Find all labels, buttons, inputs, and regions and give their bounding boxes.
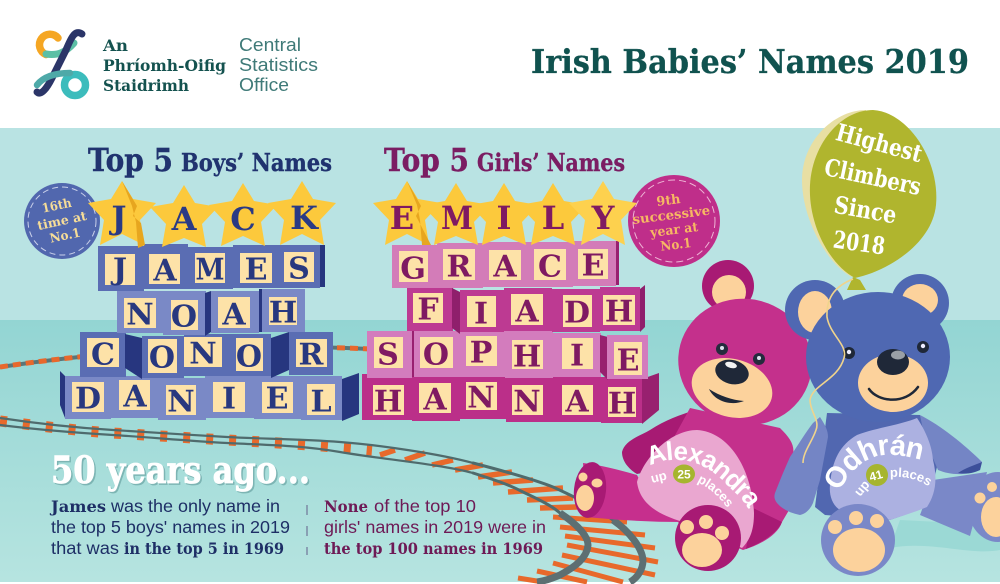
- badge: 16th time at No.1: time at: [36, 208, 88, 233]
- name: Daniel: D: [75, 382, 101, 416]
- blue bear label: places: [890, 468, 931, 486]
- logo English name: [239, 35, 318, 95]
- blue bear body: [815, 413, 937, 520]
- pink bear arm: [622, 410, 705, 474]
- heading: top 5 girls: [384, 141, 625, 179]
- name: Sophie: [367, 331, 648, 380]
- blue bear leg: [920, 472, 987, 536]
- pink bear front foot: [675, 505, 741, 571]
- boys note: the top 5 boys' names in 2019: [51, 517, 290, 537]
- name: Fiadh: A: [514, 294, 539, 330]
- name: Emily with stars: [373, 181, 637, 245]
- balloon knot: [847, 277, 866, 290]
- name: Jack with stars: J: [108, 199, 127, 237]
- logo Irish name: An: [102, 36, 128, 55]
- name: Daniel: [60, 371, 359, 421]
- pink bear label: up: [649, 467, 668, 486]
- blue bear label: up: [851, 477, 873, 499]
- pink bear: Alexandra: [574, 260, 810, 571]
- name: Fiadh: F: [417, 292, 439, 328]
- pink bear back foot: [571, 460, 609, 520]
- divider: [306, 505, 308, 555]
- pink bear body: [645, 408, 793, 550]
- heading: top 5 boys: Top 5: [88, 141, 173, 179]
- badge: 16th time at No.1: 16th: [40, 195, 73, 216]
- girls note: None: [324, 497, 368, 516]
- blue bear left ear: [785, 280, 845, 340]
- logo English name: Statistics: [239, 55, 318, 75]
- heading: top 5 boys: [88, 141, 332, 179]
- name: Grace: G: [400, 252, 426, 286]
- name: Grace: C: [538, 250, 562, 284]
- name: Hannah: A: [422, 382, 447, 418]
- badge: 9th successive year at No.1: No.1: [660, 236, 692, 255]
- badge: 16th time at No.1: No.1: [48, 225, 82, 246]
- girls note: girls' names in 2019 were in: [324, 517, 546, 537]
- pink bear label: Alexandra: [650, 441, 758, 509]
- name: Sophie: O: [423, 338, 449, 372]
- name: Hannah: N: [467, 380, 495, 416]
- blue bear front foot: [821, 504, 895, 576]
- name: Conor: O: [236, 340, 262, 374]
- boys note: in the top 5 in 1969: [124, 539, 284, 558]
- name: Emily with stars: L: [542, 199, 564, 237]
- name: Noah: H: [269, 296, 297, 330]
- blue bear left arm: [774, 417, 828, 515]
- boys note: [49, 496, 290, 558]
- girls note: of the top 10: [374, 496, 476, 516]
- track sleepers: [0, 421, 658, 582]
- badge: 9th successive year at No.1: successive: [632, 204, 711, 228]
- 50 years ago heading: 50 years ago...: [51, 448, 310, 492]
- badge: 9th successive year at No.1: year at: [648, 220, 699, 241]
- near train track: [0, 418, 658, 582]
- girls note: [324, 496, 546, 558]
- blue bear label: Odhrán: [826, 434, 922, 488]
- name: Jack with stars: A: [171, 200, 198, 238]
- heading: top 5 boys: Boys’ Names: [181, 148, 332, 177]
- name: Emily with stars: E: [390, 199, 414, 237]
- badge: 9th successive year at No.1: [628, 175, 720, 267]
- name: Sophie: I: [570, 338, 584, 374]
- blue bear right arm: [920, 415, 982, 474]
- balloon text: Highest: [833, 117, 925, 168]
- blue bear: Odhran: [774, 274, 1000, 576]
- name: Fiadh: H: [605, 294, 633, 330]
- 50 years ago text: [49, 448, 546, 558]
- name: Daniel: N: [167, 384, 195, 420]
- boys note: was the only name in: [110, 496, 280, 516]
- girls blocks: [362, 181, 659, 424]
- balloon string: [803, 279, 853, 463]
- name: Fiadh: I: [474, 296, 488, 332]
- name: Sophie: H: [513, 340, 541, 374]
- name: Daniel: L: [310, 384, 332, 420]
- name: Jack with stars: C: [230, 200, 256, 238]
- name: Conor: C: [91, 338, 115, 372]
- name: James: [98, 244, 325, 291]
- name: Hannah: [362, 373, 659, 424]
- name: James: J: [110, 252, 127, 288]
- pink bear head: [664, 284, 826, 440]
- name: James: E: [245, 252, 267, 288]
- name: Conor: O: [149, 340, 175, 376]
- boys blocks: [60, 181, 359, 421]
- logo Irish name: Phríomh-Oifig: [103, 56, 226, 75]
- pink bear belly: [637, 430, 754, 548]
- logo: [37, 33, 318, 96]
- name: Conor: [80, 332, 333, 379]
- name: Jack with stars: K: [290, 199, 319, 237]
- pink bear ear: [702, 260, 754, 312]
- balloon highlight: [802, 110, 870, 277]
- balloon body: [810, 110, 936, 278]
- name: James: M: [196, 252, 224, 288]
- boys note: James: [49, 497, 106, 516]
- girls note: the top 100 names in 1969: [324, 539, 543, 558]
- blue bear belly: [830, 418, 935, 520]
- blue bear label: 41: [868, 467, 885, 484]
- name: Jack with stars: [88, 181, 336, 248]
- name: Hannah: H: [374, 384, 402, 420]
- pink bear leg: [583, 463, 682, 522]
- name: Grace: A: [492, 250, 517, 284]
- name: James: A: [152, 254, 177, 288]
- name: Grace: [392, 241, 619, 288]
- name: Noah: N: [126, 298, 154, 332]
- logo Irish name: Staidrimh: [103, 76, 189, 95]
- pink bear label: 25: [677, 468, 691, 482]
- balloon text: Since: [832, 190, 899, 229]
- logo Irish name: [102, 36, 226, 95]
- heading: top 5 girls: Girls’ Names: [477, 148, 625, 177]
- name: Grace: R: [447, 250, 473, 284]
- name: Emily with stars: I: [497, 199, 511, 237]
- balloon text: [822, 117, 925, 261]
- balloon text: Climbers: [822, 152, 924, 201]
- name: Noah: A: [221, 298, 246, 332]
- name: Sophie: S: [377, 338, 399, 372]
- heading: top 5 girls: Top 5: [384, 141, 469, 179]
- name: Fiadh: D: [564, 296, 590, 330]
- logo mark: [37, 33, 86, 96]
- pink bear label: places: [696, 476, 732, 507]
- blue bear head: [806, 292, 950, 422]
- name: Hannah: N: [513, 384, 541, 420]
- logo English name: Central: [239, 35, 301, 55]
- logo English name: Office: [239, 75, 289, 95]
- boys note: that was: [51, 538, 119, 558]
- name: Grace: E: [582, 248, 604, 284]
- name: Sophie: P: [470, 336, 492, 370]
- balloon text: 2018: [831, 225, 887, 261]
- blue bear right foot: [968, 472, 1000, 542]
- pink bear underside: [746, 508, 782, 549]
- name: Daniel: I: [222, 382, 236, 416]
- name: Emily with stars: M: [441, 199, 473, 237]
- name: Sophie: E: [617, 344, 639, 378]
- name: Daniel: E: [266, 382, 288, 416]
- 50 years ago heading: 50 years ago...: [52, 450, 312, 494]
- blue bear right ear: [891, 274, 949, 332]
- badge: 9th successive year at No.1: 9th: [656, 192, 682, 210]
- balloon: [802, 110, 936, 463]
- name: Emily with stars: Y: [591, 199, 616, 237]
- far train track: [0, 347, 370, 367]
- name: Hannah: H: [608, 386, 636, 422]
- name: James: S: [288, 252, 310, 286]
- name: Noah: [117, 289, 305, 336]
- name: Daniel: A: [122, 380, 147, 414]
- track rails: [0, 418, 643, 582]
- name: Conor: N: [189, 336, 217, 372]
- name: Fiadh: [407, 285, 645, 334]
- name: Conor: R: [299, 338, 325, 372]
- name: Hannah: A: [564, 384, 589, 420]
- name: Noah: O: [171, 300, 197, 334]
- title: Irish Babies’ Names 2019: [531, 42, 969, 81]
- badge: 16th time at No.1: [24, 183, 100, 259]
